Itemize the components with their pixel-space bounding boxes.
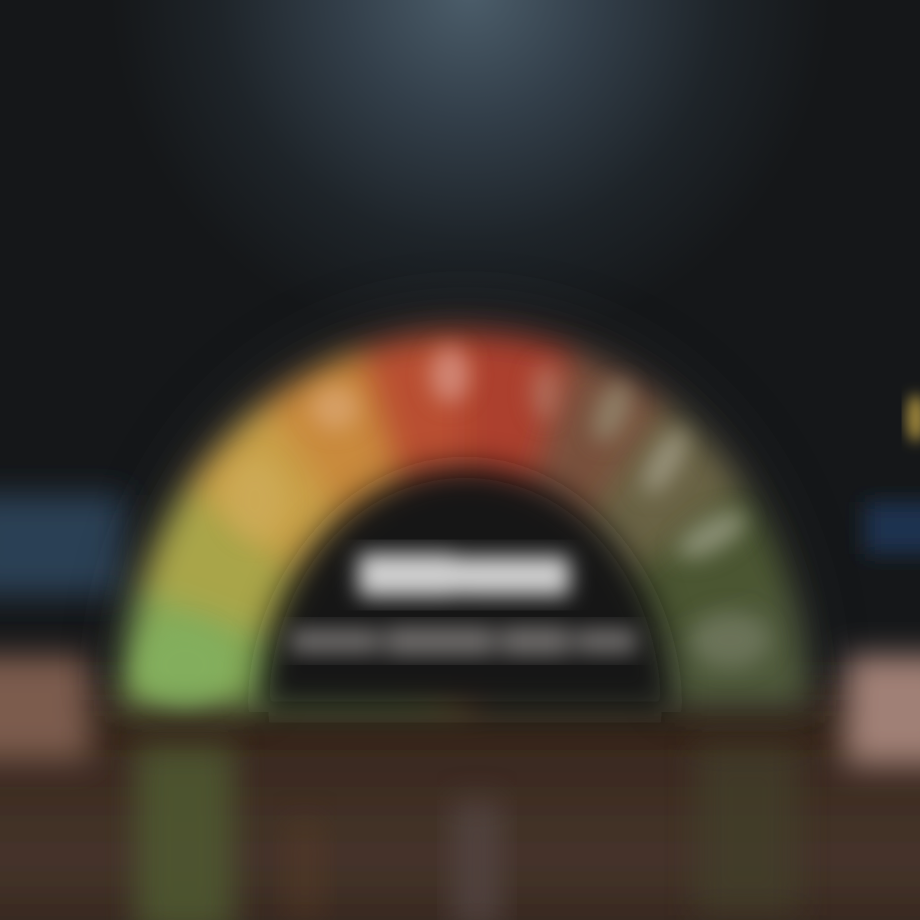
gauge centre subtitle, illegible blurred	[290, 626, 637, 656]
centre reflection on table	[452, 800, 502, 920]
gauge arc wedges	[123, 333, 807, 705]
left blue panel	[0, 495, 125, 595]
gauge centre heading, illegible blurred	[358, 553, 570, 597]
top light glow	[0, 0, 920, 400]
green reflection on table	[135, 745, 235, 920]
right reflection on table	[695, 745, 800, 915]
warm streak on table	[285, 820, 325, 920]
gauge highlight marks	[140, 347, 770, 705]
right yellow spot	[907, 394, 920, 442]
wooden table surface	[0, 655, 920, 920]
gauge inner dark arch	[258, 467, 672, 712]
gauge faint haze	[185, 378, 745, 700]
right blue panel	[865, 502, 920, 554]
right table highlight	[845, 655, 920, 765]
left table highlight	[0, 655, 90, 760]
